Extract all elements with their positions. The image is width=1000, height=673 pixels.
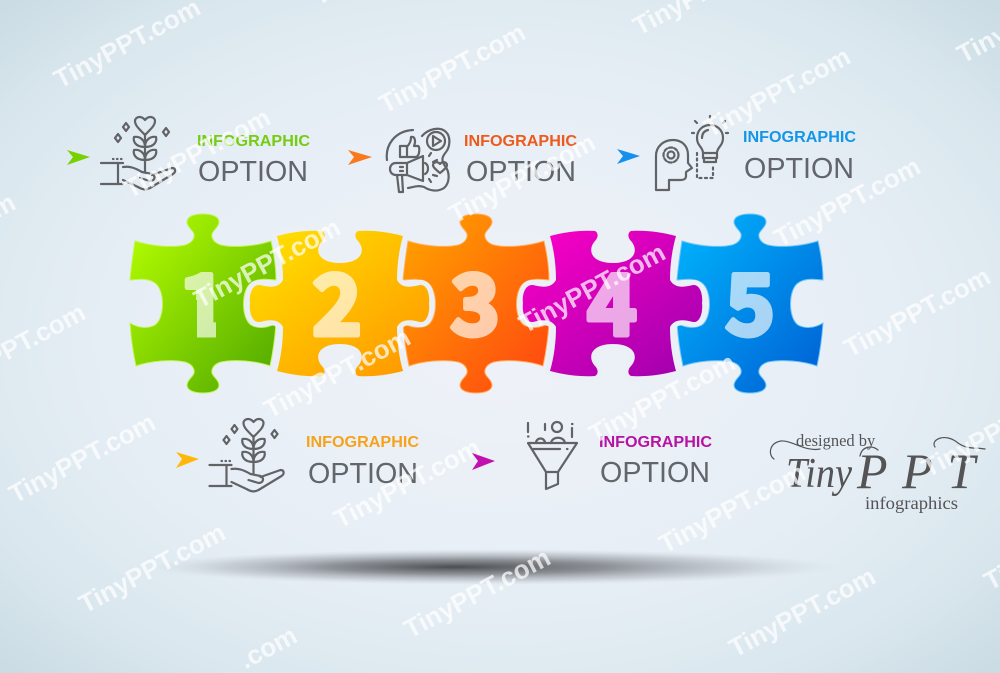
logo: script PPT: PPT [856, 443, 978, 499]
option 4 [176, 419, 419, 491]
arrow: green [67, 150, 90, 165]
watermarks: TinyPPT.com [839, 261, 995, 363]
watermarks: TinyPPT.com [189, 212, 345, 314]
number 1: 1 [178, 239, 228, 360]
option 2 [348, 129, 577, 192]
label: option: OPTION [308, 458, 418, 490]
watermarks: TinyPPT.com [699, 41, 855, 143]
watermarks: TinyPPT.com [74, 517, 230, 619]
watermarks: TinyPPT.com [374, 17, 530, 119]
watermarks: TinyPPT.com [584, 347, 740, 449]
watermarks: TinyPPT.com [444, 127, 600, 229]
icon: marketing megaphone [387, 129, 449, 192]
arrow: magenta [472, 453, 495, 470]
puzzle piece 2: yellow [250, 231, 429, 376]
icon: hand with plant [210, 419, 284, 491]
number 2: 2 [312, 239, 362, 360]
option 1 [67, 117, 310, 189]
arrow: orange [348, 150, 372, 165]
arrow: blue [617, 149, 640, 164]
label: option: OPTION [198, 156, 308, 188]
icon: funnel [528, 422, 577, 489]
label: infographic blue: INFOGRAPHIC [743, 129, 856, 146]
icon: head with idea bulb [656, 116, 728, 190]
number 4: 4 [587, 239, 637, 360]
logo: designed by Tiny PPT infographics [770, 431, 985, 513]
label: option: OPTION [744, 153, 854, 185]
label: infographic amber: INFOGRAPHIC [306, 434, 419, 451]
watermarks: TinyPPT.com [514, 237, 670, 339]
puzzle piece 3: orange [403, 214, 549, 393]
watermarks: TinyPPT.com [259, 322, 415, 424]
puzzle piece 4: magenta [523, 231, 702, 376]
number 5: 5 [725, 239, 775, 360]
puzzle piece 1: green [130, 214, 276, 393]
logo swashes [770, 438, 985, 459]
option 5 [472, 422, 712, 489]
floating shadow [148, 549, 838, 585]
logo: designed by: designed by [796, 431, 876, 450]
label: infographic green: INFOGRAPHIC [197, 133, 310, 150]
number 3: 3 [450, 239, 500, 360]
watermarks: TinyPPT.com [769, 151, 925, 253]
watermarks: TinyPPT.com [329, 432, 485, 534]
label: infographic orange: INFOGRAPHIC [464, 133, 577, 150]
logo: script name: Tiny [786, 451, 852, 497]
label: option: OPTION [466, 156, 576, 188]
watermarks: TinyPPT.com [654, 457, 810, 559]
watermarks: TinyPPT.com [724, 561, 880, 663]
icon: hand with plant [101, 117, 175, 189]
watermarks: TinyPPT.com [399, 542, 555, 644]
puzzle piece 5: blue [677, 214, 823, 393]
label: option: OPTION [600, 457, 710, 489]
arrow: amber [176, 452, 199, 468]
logo: infographics: infographics [865, 493, 958, 513]
option 3 [617, 116, 856, 190]
puzzle chain [130, 214, 823, 393]
watermarks: TinyPPT.com [4, 407, 160, 509]
label: infographic magenta: INFOGRAPHIC [599, 434, 712, 451]
watermarks: TinyPPT.com [119, 102, 275, 204]
